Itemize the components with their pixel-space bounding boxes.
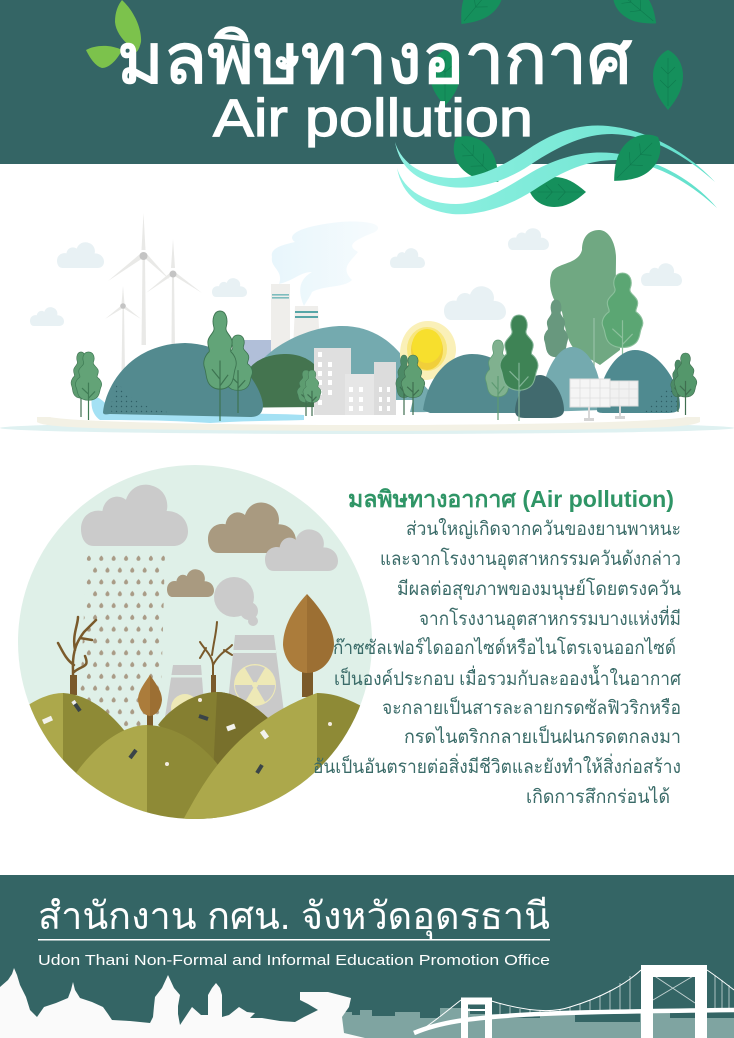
wind turbines: [105, 213, 202, 372]
brown trees: [138, 594, 334, 728]
ground base: [0, 397, 734, 434]
title: [117, 20, 632, 148]
wave swooshes: [395, 126, 717, 214]
city skyline silhouette: [342, 1008, 734, 1038]
footer office name: สำนักงาน กศน. จังหวัดอุดรธานี: [38, 896, 550, 939]
circle background: [18, 465, 372, 819]
foreground hills: [103, 343, 680, 418]
back hills and factory: [240, 284, 456, 415]
footer rule: [38, 939, 550, 940]
solar panels: [570, 379, 638, 421]
body text: จากโรงงานอุตสาหกรรมบางแห่งที่มี: [419, 605, 681, 631]
storm clouds: [81, 485, 338, 597]
body text: เป็นองค์ประกอบ เมื่อรวมกับละอองน้ำในอากาศ: [334, 665, 681, 690]
background trees: [544, 230, 643, 380]
leaf: light green pair: [86, 0, 141, 68]
illustration: city landscape: [0, 213, 734, 434]
heading: มลพิษทางอากาศ (Air pollution): [348, 486, 674, 512]
litter on hills: [43, 698, 332, 773]
bridge: [414, 970, 734, 1038]
city buildings: [314, 348, 396, 415]
title: English: Air pollution: [213, 89, 533, 148]
footer band: [0, 875, 734, 1038]
chimney smoke: [214, 577, 258, 626]
rain: [78, 553, 165, 735]
body text: อันเป็นอันตรายต่อสิ่งมีชีวิตและยังทำให้สิ่งก่อสร้าง: [313, 753, 681, 778]
leaf: right: [653, 50, 683, 110]
clouds: [30, 228, 682, 326]
body text: ก๊าซซัลเฟอร์ไดออกไซด์หรือไนโตรเจนออกไซด์: [333, 636, 676, 659]
body text: และจากโรงงานอุตสาหกรรมควันดังกล่าว: [380, 547, 681, 571]
body text: เกิดการสึกกร่อนได้: [526, 786, 670, 808]
leaf: behind title: [430, 50, 460, 106]
green trees: [71, 311, 697, 421]
body text: มีผลต่อสุขภาพของมนุษย์โดยตรงควัน: [397, 577, 681, 601]
hills: [30, 692, 360, 819]
footer English name: Udon Thani Non-Formal and Informal Education Promotion Office: [38, 952, 550, 969]
leaf: top right: [604, 0, 666, 35]
landmarks silhouette: [0, 968, 365, 1038]
leaf: top centre: [448, 0, 513, 35]
panel: description text: [313, 486, 681, 808]
body text: ส่วนใหญ่เกิดจากควันของยานพาหนะ: [406, 518, 681, 540]
nuclear cooling towers: [165, 635, 284, 718]
body text: กรดไนตริกกลายเป็นฝนกรดตกลงมา: [404, 724, 681, 748]
decorative leaves: [86, 0, 683, 207]
title: Thai: มลพิษทางอากาศ: [117, 20, 632, 98]
body text: [313, 518, 681, 808]
leaf: lower right, in front of waves: [601, 124, 671, 194]
bare trees: [58, 617, 232, 695]
leaf: lower centre: [444, 126, 511, 194]
factory smoke: [272, 222, 378, 306]
leaf: bottom: [530, 177, 586, 207]
illustration: acid rain circle: [10, 465, 372, 830]
header band: [0, 0, 734, 164]
body text: จะกลายเป็นสารละลายกรดซัลฟิวริกหรือ: [382, 695, 681, 719]
